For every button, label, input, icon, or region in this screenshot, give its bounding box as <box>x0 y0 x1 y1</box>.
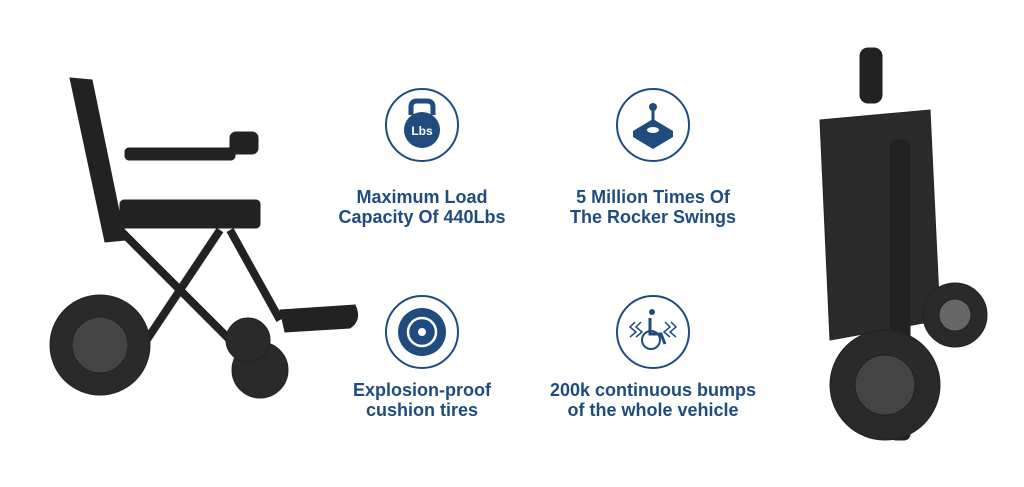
text: bumps: 200k continuous bumps <box>550 380 756 400</box>
icon: tire <box>385 295 459 369</box>
text: rocker swings: 5 Million Times Of <box>576 187 730 207</box>
text: bumps <box>550 380 756 420</box>
frame <box>120 230 280 350</box>
text: tires: cushion tires <box>366 400 478 420</box>
icon: kettlebell Lbs: Lbs <box>411 124 433 138</box>
icon: kettlebell Lbs <box>385 88 459 162</box>
backrest <box>70 78 125 242</box>
text: tires: Explosion-proof <box>353 380 491 400</box>
text: max load <box>338 187 506 227</box>
text: tires <box>353 380 492 420</box>
seat <box>120 200 260 228</box>
armrest <box>125 148 235 160</box>
text: rocker swings: The Rocker Swings <box>570 207 736 227</box>
right folded wheelchair illustration <box>820 48 988 440</box>
text: max load: Capacity Of 440Lbs <box>338 207 506 227</box>
left wheelchair illustration <box>50 78 358 398</box>
text: max load: Maximum Load <box>356 187 488 207</box>
icon: joystick <box>616 88 690 162</box>
rear wheel <box>50 295 150 395</box>
text: bumps: of the whole vehicle <box>567 400 739 420</box>
joystick <box>230 132 258 154</box>
icon: wheelchair bumps <box>616 295 690 369</box>
front wheels <box>232 342 288 398</box>
footrest <box>280 305 358 332</box>
text: rocker swings <box>570 187 736 227</box>
